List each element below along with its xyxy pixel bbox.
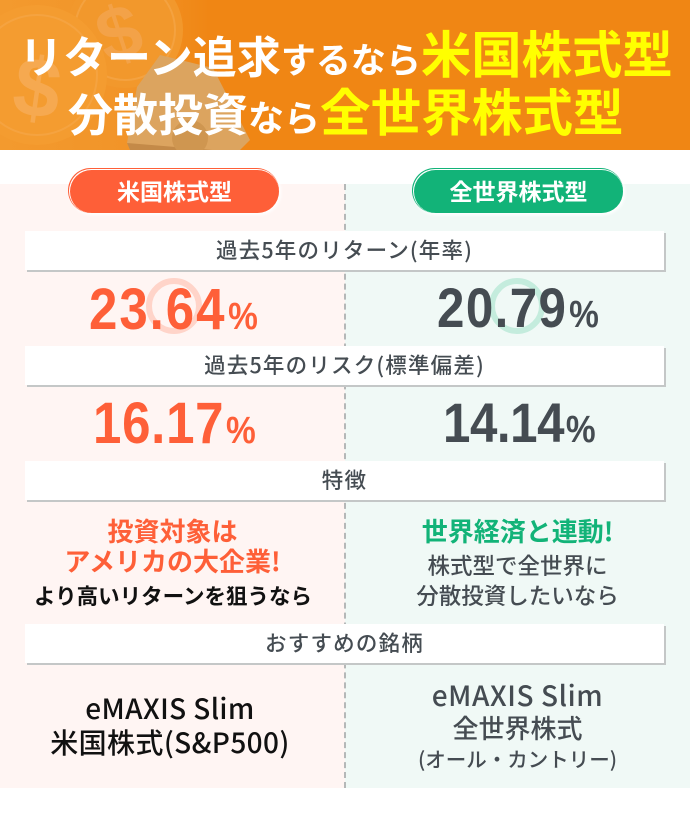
badge outline gap — [69, 169, 279, 213]
features subtext: global: 分散投資したいなら — [416, 579, 619, 611]
title line 1: リターン追求するなら米国株式型 — [19, 15, 673, 88]
value: US risk: 16.17% — [93, 391, 256, 456]
recommended fund: global: eMAXIS Slim — [432, 675, 603, 715]
section heading: features — [25, 461, 664, 500]
header banner — [0, 0, 690, 150]
features text: global: 世界経済と連動! — [422, 512, 613, 549]
badge label — [414, 170, 623, 213]
recommended fund: global: 全世界株式 — [452, 709, 582, 746]
decorative coins and banknote: $ — [8, 38, 67, 137]
section heading: features: 特徴 — [322, 464, 367, 495]
title line 2: 分散投資なら全世界株式型 — [68, 72, 624, 146]
recommended fund: US: eMAXIS Slim — [85, 688, 255, 728]
center dashed divider — [344, 184, 346, 788]
section heading: return — [25, 231, 664, 270]
features text: US: 投資対象は — [107, 512, 238, 549]
features subtext: global: 株式型で全世界に — [427, 549, 608, 581]
panel: global equity background — [345, 184, 690, 788]
panel: US equity background — [0, 184, 345, 788]
section heading: return: 過去5年のリターン(年率) — [216, 234, 473, 265]
features subtext: US: より高いリターンを狙うなら — [34, 580, 312, 611]
recommended fund: US: 米国株式(S&P500) — [50, 722, 290, 762]
badge outline gap — [413, 169, 623, 213]
recommended fund: global: (オール・カントリー) — [418, 743, 617, 773]
section heading: risk: 過去5年のリスク(標準偏差) — [204, 349, 485, 380]
value: global risk: 14.14% — [443, 391, 596, 454]
section heading: recommended: おすすめの銘柄 — [265, 627, 424, 658]
section heading: risk — [25, 346, 664, 385]
section heading: recommended — [25, 624, 664, 663]
value: global return: 20.79% — [437, 276, 599, 339]
badge: US equity — [68, 168, 279, 213]
features text: US — [64, 512, 281, 579]
badge label: 米国株式型 — [117, 173, 232, 207]
badge label — [70, 170, 279, 213]
highlight ring: global — [489, 278, 545, 334]
highlight ring: US — [146, 278, 202, 334]
recommended fund: US — [50, 688, 290, 762]
recommended fund: global — [418, 675, 617, 773]
features text: US: アメリカの大企業! — [64, 542, 281, 579]
badge: global equity — [412, 168, 623, 213]
features subtext: global — [416, 549, 619, 611]
value: US return: 23.64% — [89, 277, 258, 342]
badge label: 全世界株式型 — [450, 173, 588, 207]
decorative coins and banknote — [0, 0, 250, 150]
